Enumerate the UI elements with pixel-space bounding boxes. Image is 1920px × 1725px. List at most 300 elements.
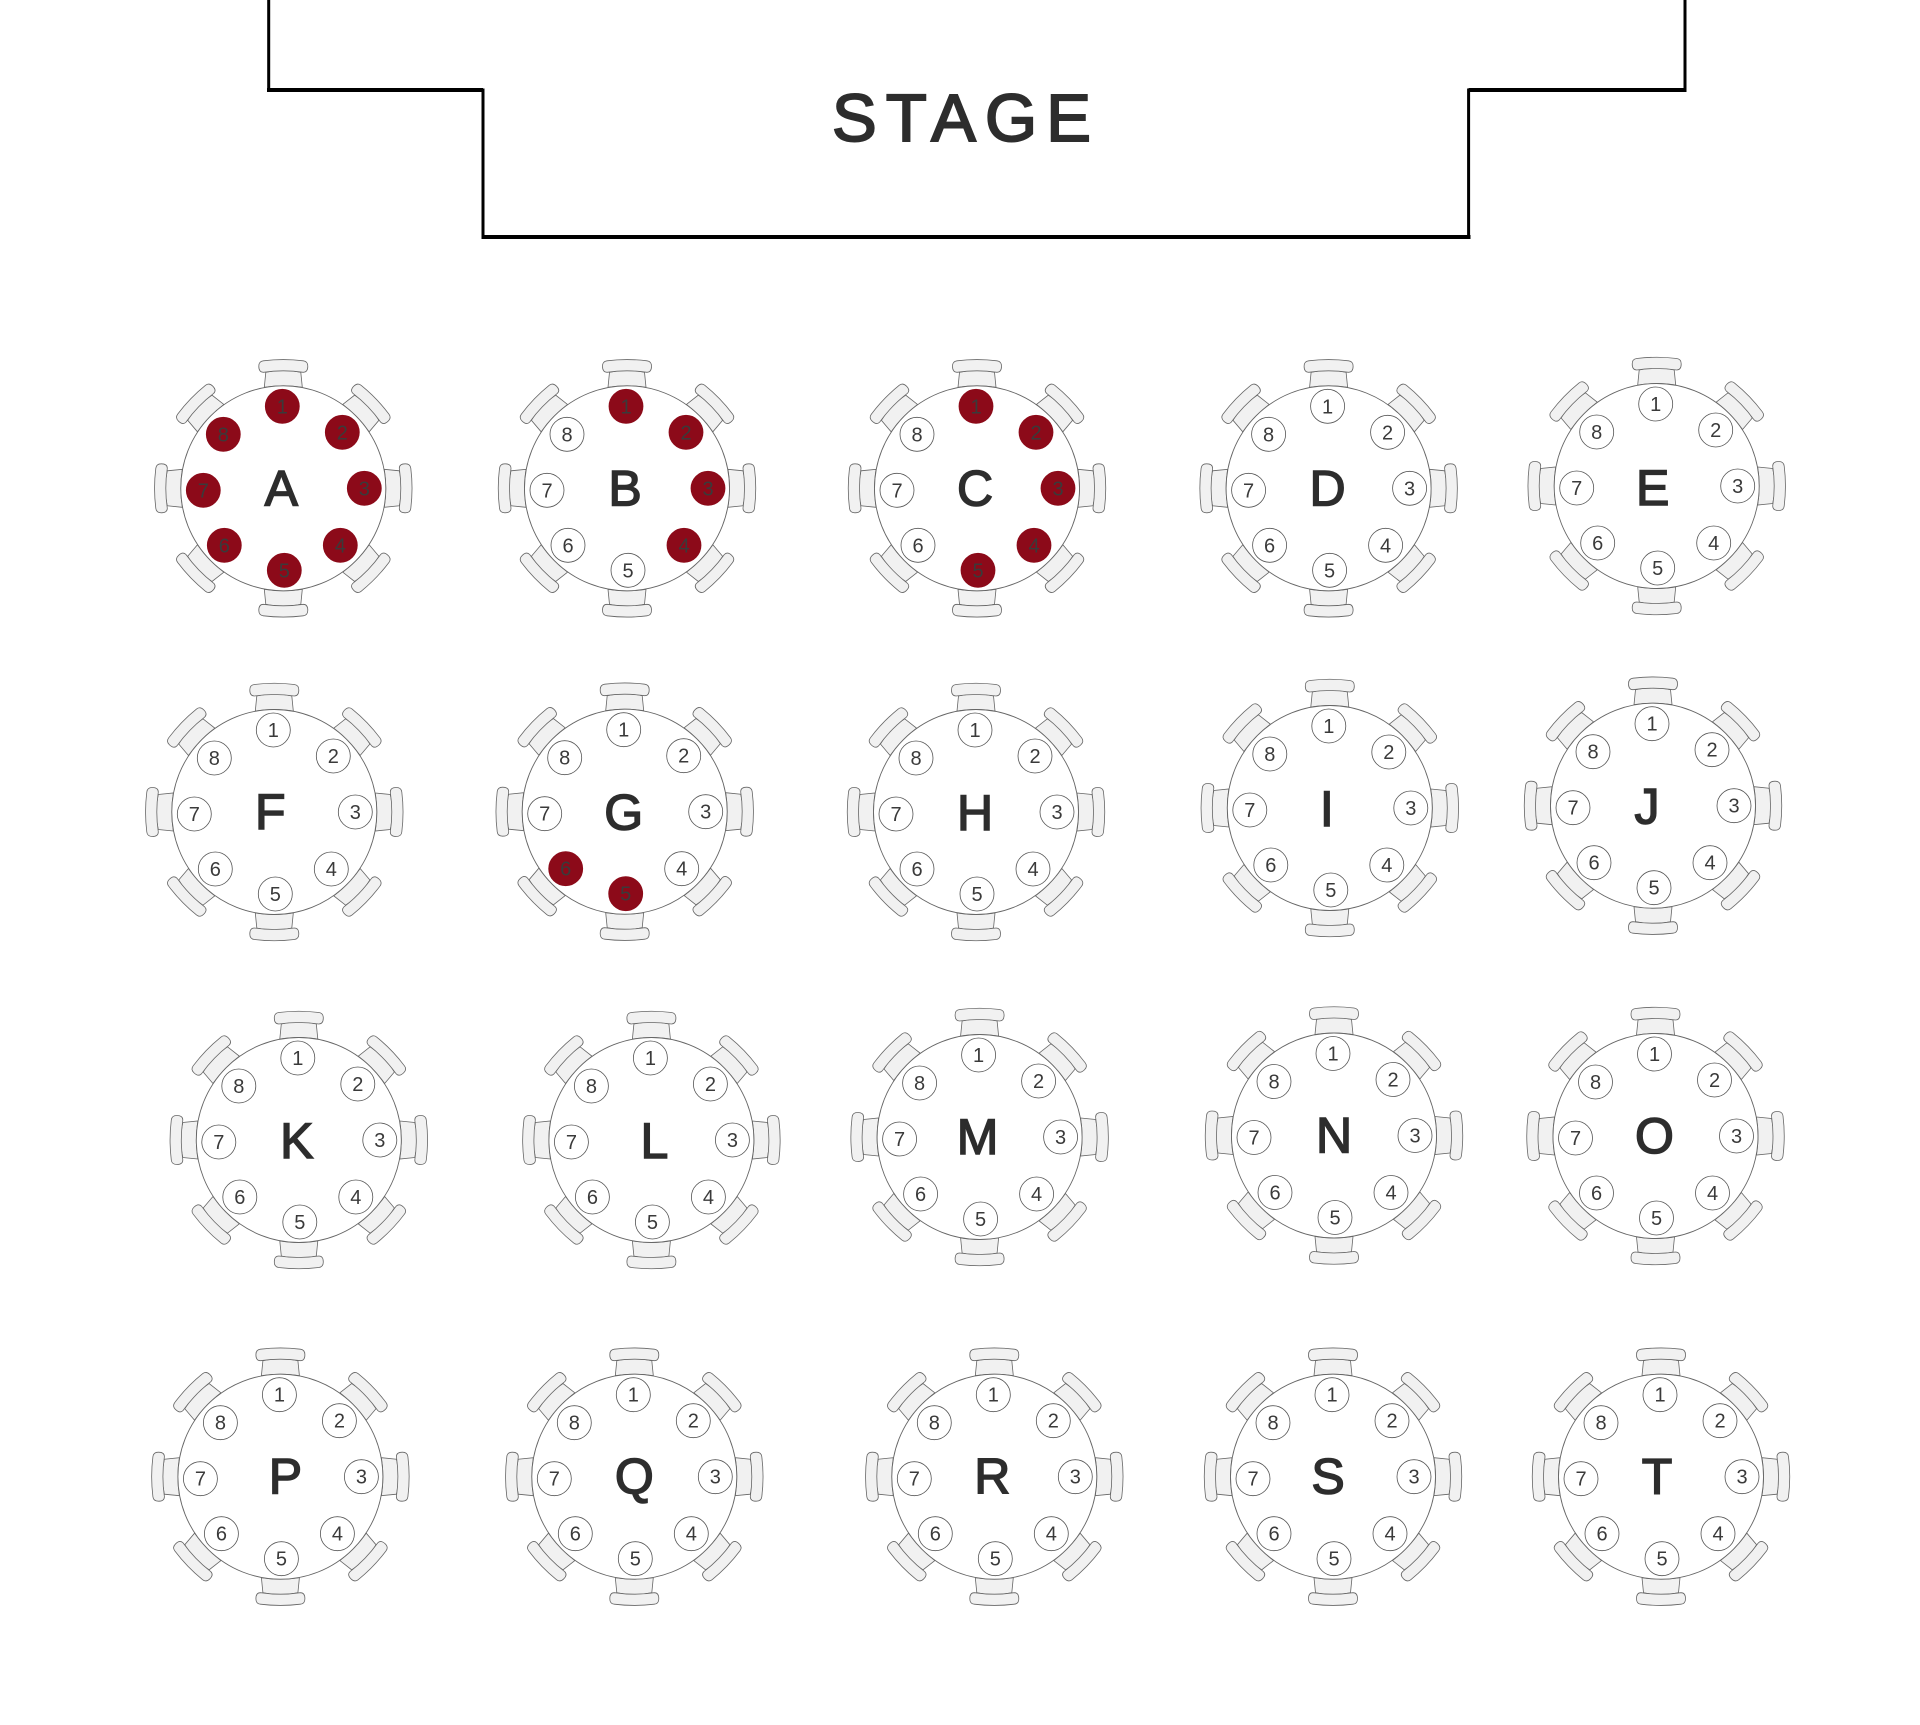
table N bbox=[1205, 1007, 1463, 1264]
seat F8: 8 bbox=[209, 748, 220, 770]
seat M6: 6 bbox=[915, 1184, 926, 1206]
seat Q6 bbox=[558, 1517, 592, 1551]
letter L: L bbox=[640, 1113, 668, 1169]
seat J5 bbox=[1637, 871, 1671, 905]
seat E4: 4 bbox=[1708, 533, 1719, 555]
seat F7: 7 bbox=[189, 804, 200, 826]
seat L8: 8 bbox=[586, 1076, 597, 1098]
chairs C bbox=[848, 360, 1106, 617]
table G bbox=[496, 683, 753, 940]
seat S4 bbox=[1373, 1517, 1407, 1551]
seat S8 bbox=[1256, 1406, 1290, 1440]
seat G3: 3 bbox=[700, 802, 711, 824]
seat C8 bbox=[900, 417, 934, 451]
chairs P bbox=[152, 1348, 409, 1605]
tabletop A bbox=[181, 386, 386, 591]
seat D4: 4 bbox=[1380, 535, 1391, 557]
letter B: B bbox=[608, 460, 642, 516]
seat F5: 5 bbox=[270, 884, 281, 906]
seat S2: 2 bbox=[1386, 1411, 1398, 1433]
seat T6 bbox=[1585, 1517, 1619, 1551]
table K bbox=[170, 1011, 428, 1269]
seat T4 bbox=[1701, 1517, 1735, 1551]
seat J3: 3 bbox=[1728, 796, 1740, 818]
seat A2 bbox=[325, 415, 359, 449]
seat E3 bbox=[1721, 469, 1755, 503]
seat J6 bbox=[1577, 846, 1611, 880]
seat I6: 6 bbox=[1265, 855, 1276, 877]
letter D: D bbox=[1310, 460, 1346, 516]
seat E1: 1 bbox=[1650, 394, 1661, 416]
seat L1 bbox=[633, 1041, 667, 1075]
seat R3 bbox=[1058, 1460, 1092, 1494]
tabletop G bbox=[522, 709, 727, 914]
letter E: E bbox=[1636, 460, 1669, 516]
table B bbox=[498, 360, 756, 617]
seat O7 bbox=[1558, 1121, 1592, 1155]
table J bbox=[1524, 677, 1782, 934]
seat E8 bbox=[1580, 415, 1614, 449]
chairs H bbox=[847, 683, 1105, 941]
seat L6: 6 bbox=[587, 1187, 598, 1209]
seat C5: 5 bbox=[972, 560, 984, 582]
seat H8 bbox=[899, 741, 933, 775]
seat C5 bbox=[961, 553, 995, 587]
seat S7: 7 bbox=[1247, 1469, 1259, 1491]
seat G5: 5 bbox=[620, 884, 631, 906]
seat G2 bbox=[667, 739, 701, 773]
letter K: K bbox=[280, 1113, 313, 1169]
seat P3 bbox=[344, 1460, 378, 1494]
seat I4: 4 bbox=[1381, 855, 1392, 877]
tabletop T bbox=[1558, 1374, 1764, 1579]
chairs E bbox=[1528, 357, 1785, 615]
seat C1 bbox=[959, 389, 993, 423]
seat E6: 6 bbox=[1592, 533, 1603, 555]
tabletop J bbox=[1550, 703, 1756, 908]
seat L4 bbox=[691, 1180, 725, 1214]
seat A4 bbox=[323, 528, 357, 562]
seat F1 bbox=[256, 713, 290, 747]
seat O3 bbox=[1720, 1119, 1754, 1153]
seat N5: 5 bbox=[1329, 1208, 1341, 1230]
seat T7: 7 bbox=[1575, 1469, 1587, 1491]
seat D5 bbox=[1313, 553, 1347, 587]
seat E2: 2 bbox=[1710, 420, 1721, 442]
seat Q4 bbox=[674, 1517, 708, 1551]
seat P2 bbox=[322, 1404, 356, 1438]
stage outline bbox=[267, 0, 1686, 237]
seat A6: 6 bbox=[219, 535, 230, 557]
seat O1: 1 bbox=[1649, 1044, 1660, 1066]
seat K3 bbox=[363, 1123, 397, 1157]
seat R4: 4 bbox=[1046, 1524, 1057, 1546]
seat C6: 6 bbox=[912, 535, 924, 557]
seat E8: 8 bbox=[1591, 422, 1602, 444]
seat P5: 5 bbox=[276, 1549, 287, 1571]
seat T8: 8 bbox=[1595, 1413, 1607, 1435]
chairs Q bbox=[506, 1348, 763, 1605]
table D bbox=[1200, 360, 1457, 617]
tabletop M bbox=[877, 1034, 1082, 1240]
seat C8: 8 bbox=[911, 424, 923, 446]
seat G4: 4 bbox=[676, 859, 687, 881]
seat B4 bbox=[667, 528, 701, 562]
letter N: N bbox=[1316, 1108, 1352, 1164]
table C bbox=[848, 360, 1106, 617]
seat D1 bbox=[1311, 389, 1345, 423]
seat B7: 7 bbox=[541, 480, 553, 502]
seat G8 bbox=[548, 741, 582, 775]
seat K1 bbox=[281, 1041, 315, 1075]
seat J7: 7 bbox=[1567, 798, 1579, 820]
seat A4: 4 bbox=[335, 535, 346, 557]
letter A: A bbox=[265, 460, 299, 516]
seat D6: 6 bbox=[1264, 535, 1275, 557]
seat F8 bbox=[197, 741, 231, 775]
seat O7: 7 bbox=[1570, 1128, 1581, 1150]
seat I4 bbox=[1370, 848, 1404, 882]
seat F4 bbox=[314, 852, 348, 886]
letter S: S bbox=[1311, 1449, 1345, 1505]
seat J2 bbox=[1695, 733, 1729, 767]
seat D6 bbox=[1253, 528, 1287, 562]
seat R8 bbox=[917, 1406, 951, 1440]
seat L5: 5 bbox=[647, 1212, 658, 1234]
seat N8: 8 bbox=[1268, 1072, 1280, 1094]
seat R1 bbox=[976, 1378, 1010, 1412]
seat H8: 8 bbox=[910, 748, 922, 770]
seat C6 bbox=[901, 528, 935, 562]
seat F2 bbox=[316, 739, 350, 773]
seat O3: 3 bbox=[1731, 1126, 1742, 1148]
seat M3 bbox=[1044, 1120, 1078, 1154]
seat I7 bbox=[1233, 793, 1267, 827]
seat C3 bbox=[1041, 471, 1075, 505]
seat G7 bbox=[528, 797, 562, 831]
seat R6 bbox=[918, 1517, 952, 1551]
seat J2: 2 bbox=[1706, 740, 1718, 762]
seat J4: 4 bbox=[1704, 853, 1716, 875]
seat K5: 5 bbox=[294, 1212, 305, 1234]
seat P1 bbox=[262, 1378, 296, 1412]
seat R4 bbox=[1034, 1517, 1068, 1551]
seat D7: 7 bbox=[1243, 480, 1254, 502]
seat D2: 2 bbox=[1382, 422, 1393, 444]
seat A3: 3 bbox=[359, 478, 370, 500]
seat J7 bbox=[1556, 791, 1590, 825]
seat M2: 2 bbox=[1033, 1071, 1044, 1093]
table H bbox=[847, 683, 1105, 941]
seat Q8 bbox=[557, 1406, 591, 1440]
seat C4 bbox=[1017, 528, 1051, 562]
seat A7: 7 bbox=[198, 480, 209, 502]
seat Q1 bbox=[616, 1378, 650, 1412]
seat H6: 6 bbox=[911, 859, 923, 881]
seat Q6: 6 bbox=[570, 1524, 581, 1546]
seat A8 bbox=[206, 417, 240, 451]
seat J1: 1 bbox=[1646, 714, 1658, 736]
seat Q5 bbox=[618, 1542, 652, 1576]
seat B2 bbox=[669, 415, 703, 449]
seat N4: 4 bbox=[1385, 1182, 1397, 1204]
chairs O bbox=[1527, 1007, 1784, 1265]
seat L5 bbox=[635, 1205, 669, 1239]
seat P4 bbox=[320, 1517, 354, 1551]
seat N1 bbox=[1316, 1036, 1350, 1070]
seat Q1: 1 bbox=[628, 1385, 639, 1407]
seat C7 bbox=[880, 473, 914, 507]
seat T4: 4 bbox=[1712, 1524, 1724, 1546]
seat K7: 7 bbox=[213, 1132, 224, 1154]
chairs F bbox=[146, 683, 403, 941]
seat Q7: 7 bbox=[549, 1469, 560, 1491]
tabletop E bbox=[1554, 384, 1759, 588]
seat D5: 5 bbox=[1324, 560, 1335, 582]
seat T6: 6 bbox=[1596, 1524, 1608, 1546]
seat D1: 1 bbox=[1322, 396, 1333, 418]
seat S4: 4 bbox=[1384, 1524, 1396, 1546]
chairs B bbox=[498, 360, 756, 617]
tabletop C bbox=[874, 386, 1080, 591]
seat M8: 8 bbox=[914, 1073, 925, 1095]
seat Q3 bbox=[698, 1460, 732, 1494]
seat E6 bbox=[1581, 526, 1615, 560]
letter M: M bbox=[957, 1109, 998, 1165]
seat N4 bbox=[1374, 1176, 1408, 1210]
tabletop Q bbox=[532, 1374, 737, 1579]
seat B1: 1 bbox=[620, 396, 632, 418]
seat I3: 3 bbox=[1405, 798, 1416, 820]
seat R7 bbox=[897, 1462, 931, 1496]
table A bbox=[155, 360, 412, 617]
seat C2 bbox=[1019, 415, 1053, 449]
seat G4 bbox=[665, 852, 699, 886]
seat G5 bbox=[609, 877, 643, 911]
seat B7 bbox=[530, 473, 564, 507]
seat T5: 5 bbox=[1656, 1549, 1668, 1571]
seat A8: 8 bbox=[218, 424, 229, 446]
seat R1: 1 bbox=[988, 1385, 999, 1407]
seat J6: 6 bbox=[1588, 853, 1600, 875]
seat L3: 3 bbox=[727, 1130, 738, 1152]
seat G6: 6 bbox=[560, 859, 571, 881]
seat B5 bbox=[611, 553, 645, 587]
seat H1: 1 bbox=[969, 720, 981, 742]
seat M6 bbox=[904, 1177, 938, 1211]
table L bbox=[523, 1011, 780, 1269]
letter C: C bbox=[957, 460, 993, 516]
seat S1: 1 bbox=[1326, 1385, 1338, 1407]
seat R7: 7 bbox=[909, 1469, 920, 1491]
seat Q2 bbox=[676, 1404, 710, 1438]
seat M1 bbox=[962, 1038, 996, 1072]
seat H5: 5 bbox=[971, 884, 983, 906]
seat A6 bbox=[207, 528, 241, 562]
seat L1: 1 bbox=[645, 1048, 656, 1070]
seat K3: 3 bbox=[374, 1130, 385, 1152]
seat E2 bbox=[1699, 413, 1733, 447]
seat E7 bbox=[1560, 471, 1594, 505]
seat K2 bbox=[341, 1067, 375, 1101]
seat H2 bbox=[1018, 739, 1052, 773]
seat K6: 6 bbox=[234, 1187, 245, 1209]
seat J8 bbox=[1576, 735, 1610, 769]
seat B8: 8 bbox=[561, 424, 573, 446]
tabletop R bbox=[892, 1374, 1097, 1579]
seat O8: 8 bbox=[1590, 1072, 1601, 1094]
seat R2 bbox=[1036, 1404, 1070, 1438]
seat O5: 5 bbox=[1651, 1208, 1662, 1230]
seat N6: 6 bbox=[1269, 1182, 1281, 1204]
letter T: T bbox=[1642, 1449, 1672, 1505]
tabletop P bbox=[178, 1374, 383, 1579]
seat S7 bbox=[1236, 1462, 1270, 1496]
table P bbox=[152, 1348, 409, 1605]
chairs J bbox=[1524, 677, 1782, 934]
seat F2: 2 bbox=[328, 746, 339, 768]
seat G8: 8 bbox=[559, 748, 570, 770]
seat P7 bbox=[183, 1462, 217, 1496]
seat K7 bbox=[202, 1125, 236, 1159]
seat M4 bbox=[1020, 1177, 1054, 1211]
seat I2: 2 bbox=[1383, 742, 1394, 764]
seat M3: 3 bbox=[1055, 1127, 1066, 1149]
tabletop K bbox=[196, 1038, 401, 1242]
seat B8 bbox=[550, 417, 584, 451]
seat L4: 4 bbox=[703, 1187, 714, 1209]
seat M1: 1 bbox=[973, 1045, 984, 1067]
seat F7 bbox=[177, 797, 211, 831]
seat H3 bbox=[1040, 795, 1074, 829]
seat S3: 3 bbox=[1408, 1467, 1420, 1489]
seat C2: 2 bbox=[1030, 422, 1042, 444]
chairs R bbox=[866, 1348, 1123, 1605]
seat E5: 5 bbox=[1652, 558, 1663, 580]
seat P8: 8 bbox=[215, 1413, 226, 1435]
seat L7 bbox=[554, 1125, 588, 1159]
tabletop H bbox=[874, 710, 1078, 914]
seat H4 bbox=[1016, 852, 1050, 886]
chairs M bbox=[851, 1008, 1108, 1266]
seat T2: 2 bbox=[1714, 1411, 1726, 1433]
letter H: H bbox=[957, 785, 993, 841]
tabletop N bbox=[1232, 1033, 1436, 1238]
letter Q: Q bbox=[615, 1449, 654, 1505]
seat I7: 7 bbox=[1244, 800, 1255, 822]
seat A5: 5 bbox=[279, 560, 290, 582]
seat L3 bbox=[715, 1123, 749, 1157]
seat H1 bbox=[958, 713, 992, 747]
seat R8: 8 bbox=[929, 1413, 940, 1435]
seat H5 bbox=[960, 877, 994, 911]
letter R: R bbox=[974, 1449, 1010, 1505]
seat H6 bbox=[900, 852, 934, 886]
seat I8 bbox=[1253, 737, 1287, 771]
seat B6 bbox=[551, 528, 585, 562]
tabletop L bbox=[549, 1038, 754, 1242]
seat L8 bbox=[574, 1069, 608, 1103]
seat O6: 6 bbox=[1591, 1183, 1602, 1205]
seat O1 bbox=[1638, 1037, 1672, 1071]
seat N1: 1 bbox=[1327, 1044, 1339, 1066]
seat S2 bbox=[1375, 1404, 1409, 1438]
seat D8 bbox=[1252, 417, 1286, 451]
seat J1 bbox=[1635, 707, 1669, 741]
letter O: O bbox=[1635, 1108, 1674, 1164]
seat E1 bbox=[1639, 387, 1673, 421]
chairs N bbox=[1205, 1007, 1463, 1264]
seat F3 bbox=[338, 795, 372, 829]
seat P7: 7 bbox=[195, 1469, 206, 1491]
tabletop S bbox=[1230, 1374, 1436, 1579]
tabletop I bbox=[1227, 706, 1432, 910]
seat M5 bbox=[964, 1202, 998, 1236]
letter P: P bbox=[269, 1449, 302, 1505]
seat L6 bbox=[575, 1180, 609, 1214]
chairs I bbox=[1201, 679, 1459, 937]
seat T3 bbox=[1725, 1460, 1759, 1494]
seat N3: 3 bbox=[1409, 1126, 1421, 1148]
seat A1 bbox=[265, 389, 299, 423]
seat T5 bbox=[1645, 1542, 1679, 1576]
seat J4 bbox=[1693, 846, 1727, 880]
seat I3 bbox=[1394, 791, 1428, 825]
seat A2: 2 bbox=[337, 422, 348, 444]
seat I8: 8 bbox=[1264, 744, 1275, 766]
seat O8 bbox=[1578, 1065, 1612, 1099]
seat A1: 1 bbox=[277, 396, 288, 418]
seat G6 bbox=[549, 852, 583, 886]
seat T1: 1 bbox=[1654, 1385, 1666, 1407]
seat P1: 1 bbox=[274, 1385, 285, 1407]
seat P4: 4 bbox=[332, 1524, 343, 1546]
seat P3: 3 bbox=[356, 1467, 367, 1489]
seat P6: 6 bbox=[216, 1524, 227, 1546]
table T bbox=[1532, 1348, 1790, 1605]
seat N7 bbox=[1237, 1120, 1271, 1154]
seat F1: 1 bbox=[268, 720, 279, 742]
seat O2: 2 bbox=[1709, 1070, 1720, 1092]
table S bbox=[1204, 1348, 1462, 1605]
seat E3: 3 bbox=[1732, 476, 1743, 498]
seat A7 bbox=[186, 473, 220, 507]
seat A3 bbox=[347, 471, 381, 505]
seat S8: 8 bbox=[1267, 1413, 1279, 1435]
seat J5: 5 bbox=[1648, 878, 1660, 900]
seat D4 bbox=[1369, 528, 1403, 562]
seat K6 bbox=[223, 1180, 257, 1214]
table M bbox=[851, 1008, 1108, 1266]
seat C7: 7 bbox=[891, 480, 903, 502]
seat G1: 1 bbox=[618, 720, 629, 742]
seat D7 bbox=[1232, 473, 1266, 507]
seat I5: 5 bbox=[1325, 880, 1336, 902]
seat F6 bbox=[198, 852, 232, 886]
seat R2: 2 bbox=[1048, 1411, 1059, 1433]
seat Q3: 3 bbox=[710, 1467, 721, 1489]
letter J: J bbox=[1634, 779, 1660, 835]
seat B6: 6 bbox=[562, 535, 574, 557]
seat K2: 2 bbox=[352, 1074, 363, 1096]
seat S5: 5 bbox=[1328, 1549, 1340, 1571]
table Q bbox=[506, 1348, 763, 1605]
seat Q7 bbox=[537, 1462, 571, 1496]
seat H7 bbox=[879, 797, 913, 831]
seat J8: 8 bbox=[1587, 742, 1599, 764]
letter F: F bbox=[255, 784, 286, 840]
seat M7 bbox=[883, 1122, 917, 1156]
